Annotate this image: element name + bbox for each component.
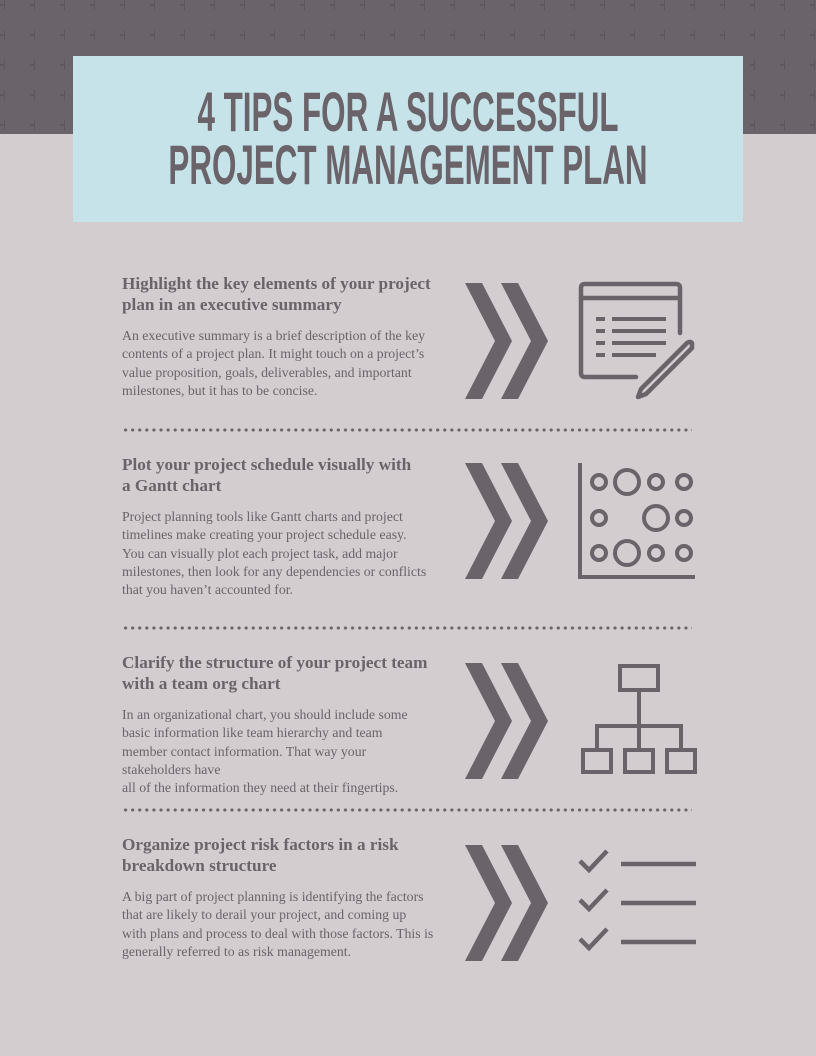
section 4 text: with plans and process to deal with those factors. This is (122, 926, 433, 941)
section 3 text: basic information like team hierarchy and team (122, 725, 383, 740)
header band (0, 0, 816, 134)
chevron 3 (465, 663, 548, 779)
icon: checklist (580, 851, 696, 948)
section 4 text (122, 835, 433, 959)
section 4 text: A big part of project planning is identifying the factors (122, 889, 424, 904)
section 3 text: In an organizational chart, you should include some (122, 707, 408, 722)
section 1 text: value proposition, goals, deliverables, and important (122, 365, 412, 380)
section 1 text: Highlight the key elements of your project (122, 274, 431, 293)
section 1 text: contents of a project plan. It might touch on a project’s (122, 346, 424, 361)
title (168, 80, 648, 196)
section 4 text: Organize project risk factors in a risk (122, 835, 399, 854)
section 2 text: You can visually plot each project task, add major (122, 546, 398, 561)
section 1 text: An executive summary is a brief description of the key (122, 328, 425, 343)
icon: gantt dots (580, 463, 695, 577)
section 2 text: milestones, then look for any dependencies or conflicts (122, 564, 426, 579)
section 4 text: breakdown structure (122, 856, 277, 875)
section 3 text: Clarify the structure of your project team (122, 653, 427, 672)
section 2 text: Plot your project schedule visually with (122, 455, 411, 474)
section 3 text: stakeholders have (122, 762, 220, 777)
section 3 text: member contact information. That way your (122, 744, 366, 759)
section 3 text: with a team org chart (122, 674, 280, 693)
section 2 text: a Gantt chart (122, 476, 221, 495)
chevron 2 (465, 463, 548, 579)
section 1 text (122, 274, 431, 398)
icon: org chart (583, 666, 695, 772)
section 2 text (122, 455, 426, 597)
title box (73, 56, 743, 222)
section 3 text: all of the information they need at their fingertips. (122, 780, 398, 795)
icon: document with pencil (581, 284, 692, 397)
section 4 text: that are likely to derail your project, and coming up (122, 907, 406, 922)
title: PROJECT MANAGEMENT PLAN (168, 133, 648, 196)
section 4 text: generally referred to as risk management. (122, 944, 351, 959)
title: 4 TIPS FOR A SUCCESSFUL (197, 80, 619, 143)
section 2 text: that you haven’t accounted for. (122, 582, 293, 597)
section 1 text: plan in an executive summary (122, 295, 342, 314)
chevron 4 (465, 845, 548, 961)
section 2 text: timelines make creating your project schedule easy. (122, 527, 407, 542)
section 2 text: Project planning tools like Gantt charts and project (122, 509, 403, 524)
section 1 text: milestones, but it has to be concise. (122, 383, 317, 398)
section 3 text (122, 653, 428, 795)
chevron 1 (465, 283, 548, 399)
